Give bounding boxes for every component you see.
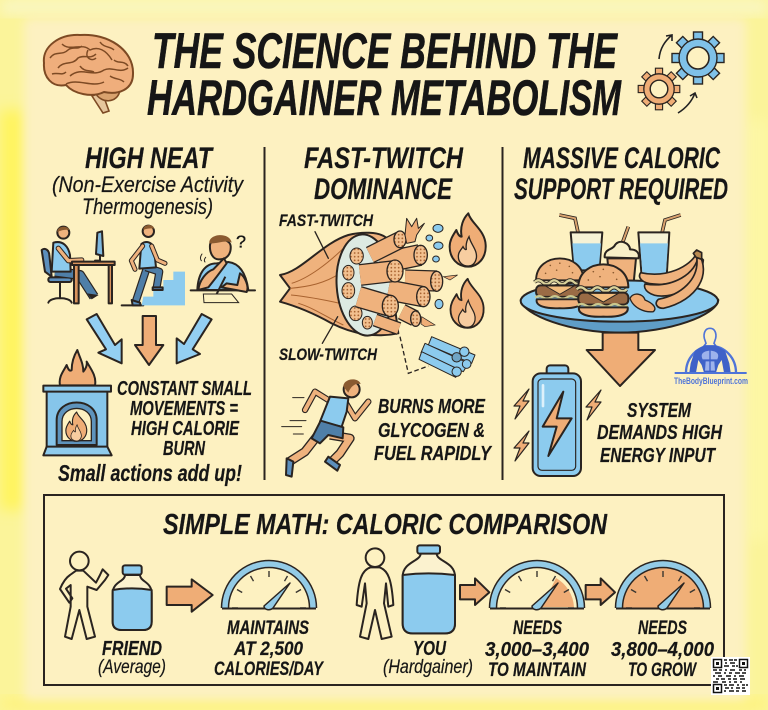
text: constant small movements: BURN <box>163 438 205 460</box>
heading: fast-twitch dominance: DOMINANCE <box>314 173 453 206</box>
text: maintains at 2,500 calories/day <box>214 618 325 680</box>
text: system demands high energy input: ENERGY INPUT <box>600 445 716 467</box>
icon: brain <box>44 35 133 113</box>
nuggets <box>630 294 655 312</box>
icon: fireplace <box>43 350 112 455</box>
icon: slow-twitch blue fibres <box>419 337 475 377</box>
illustration: person fidgeting and thinking <box>191 231 255 303</box>
text: constant small movements: HIGH CALORIE <box>131 418 239 440</box>
text: needs to grow: TO GROW <box>628 660 698 681</box>
title <box>147 23 622 126</box>
arrow: maintenance to growth <box>586 578 615 605</box>
text: friend label: FRIEND <box>102 638 162 660</box>
text: burns more glycogen: BURNS MORE <box>378 396 486 418</box>
heading: high NEAT: HIGH NEAT <box>85 142 214 175</box>
icons: small energy bolts <box>514 389 601 461</box>
illustration: plate of food <box>521 215 718 333</box>
illustration: muscle fibre bundle <box>280 218 458 373</box>
burgers <box>534 258 584 308</box>
icon: battery <box>533 365 581 476</box>
heading: high NEAT: Thermogenesis) <box>82 194 213 219</box>
label: slow-twitch: SLOW-TWITCH <box>279 345 378 364</box>
text: maintains at 2,500 calories/day: AT 2,500 <box>233 639 303 660</box>
icon: gears <box>638 32 724 113</box>
text: you label: YOU <box>413 638 446 660</box>
heading: massive caloric support required <box>514 142 728 206</box>
icon: flames <box>450 213 486 328</box>
text: burns more glycogen: FUEL RAPIDLY <box>374 443 492 465</box>
text: you label: (Hardgainer) <box>383 657 473 678</box>
icon: your large bottle <box>403 545 455 633</box>
text: friend label <box>98 638 166 678</box>
drinks <box>559 215 681 293</box>
heading: simple math: SIMPLE MATH: CALORIC COMPARISON <box>163 509 608 541</box>
panel: high NEAT <box>42 142 255 486</box>
arrow: friend to gauge <box>167 579 213 612</box>
text: needs to maintain <box>485 618 589 681</box>
illustration: sprinting runner <box>282 379 368 477</box>
heading: fast-twitch dominance: FAST-TWITCH <box>304 142 464 175</box>
text: system demands high energy input <box>597 400 722 467</box>
gauge: maintains at 2,500 <box>222 564 316 610</box>
text: needs to maintain: NEEDS <box>513 618 562 639</box>
text: needs to maintain: TO MAINTAIN <box>488 660 587 681</box>
text: maintains at 2,500 calories/day: MAINTAINS <box>227 618 309 639</box>
icon: logo TheBodyBlueprint <box>674 328 748 387</box>
arrow: food to energy <box>587 333 655 386</box>
label: fast-twitch: FAST-TWITCH <box>279 211 374 230</box>
icon: QR code <box>711 657 750 695</box>
text: needs to grow <box>611 618 714 681</box>
illustration: person fidgeting and thinking: ? <box>236 231 246 251</box>
text: burns more glycogen: GLYCOGEN & <box>378 420 485 442</box>
text: needs to maintain: 3,000–3,400 <box>485 639 589 661</box>
text: constant small movements: MOVEMENTS = <box>130 398 238 420</box>
illustration: person working at desk <box>42 227 115 303</box>
figure: you <box>357 548 393 639</box>
heading: high NEAT <box>52 142 245 219</box>
gauge: growth needs <box>616 564 710 610</box>
arrow: you to gauge <box>460 578 489 605</box>
panel: fast-twitch dominance <box>279 142 492 477</box>
plate <box>521 292 718 333</box>
heading: fast-twitch dominance <box>304 142 464 206</box>
panel: massive caloric support <box>514 142 748 476</box>
illustration: person climbing stairs <box>122 225 185 305</box>
gauge: maintenance needs <box>490 564 584 610</box>
text: burns more glycogen <box>374 396 492 465</box>
icon: fuel droplets <box>426 224 443 309</box>
text: needs to grow: NEEDS <box>638 618 687 639</box>
figure: friend <box>60 552 108 639</box>
bananas <box>640 250 703 308</box>
callout: small actions add up: Small actions add up! <box>58 460 242 486</box>
text: constant small movements <box>117 378 252 460</box>
text: constant small movements: CONSTANT SMALL <box>117 378 252 400</box>
text: friend label: (Average) <box>98 657 166 678</box>
icon: friend's bottle <box>113 565 152 630</box>
arrows: movements feed the fire <box>87 314 212 365</box>
text: system demands high energy input: SYSTEM <box>627 400 692 422</box>
text: needs to grow: 3,800–4,000 <box>611 639 714 661</box>
text: maintains at 2,500 calories/day: CALORIES/DAY <box>214 659 325 680</box>
heading: high NEAT: (Non-Exercise Activity <box>52 172 245 197</box>
panel: caloric comparison <box>44 495 724 685</box>
text: you label <box>383 638 473 678</box>
column dividers <box>264 147 502 480</box>
text: system demands high energy input: DEMANDS HIGH <box>597 422 722 444</box>
